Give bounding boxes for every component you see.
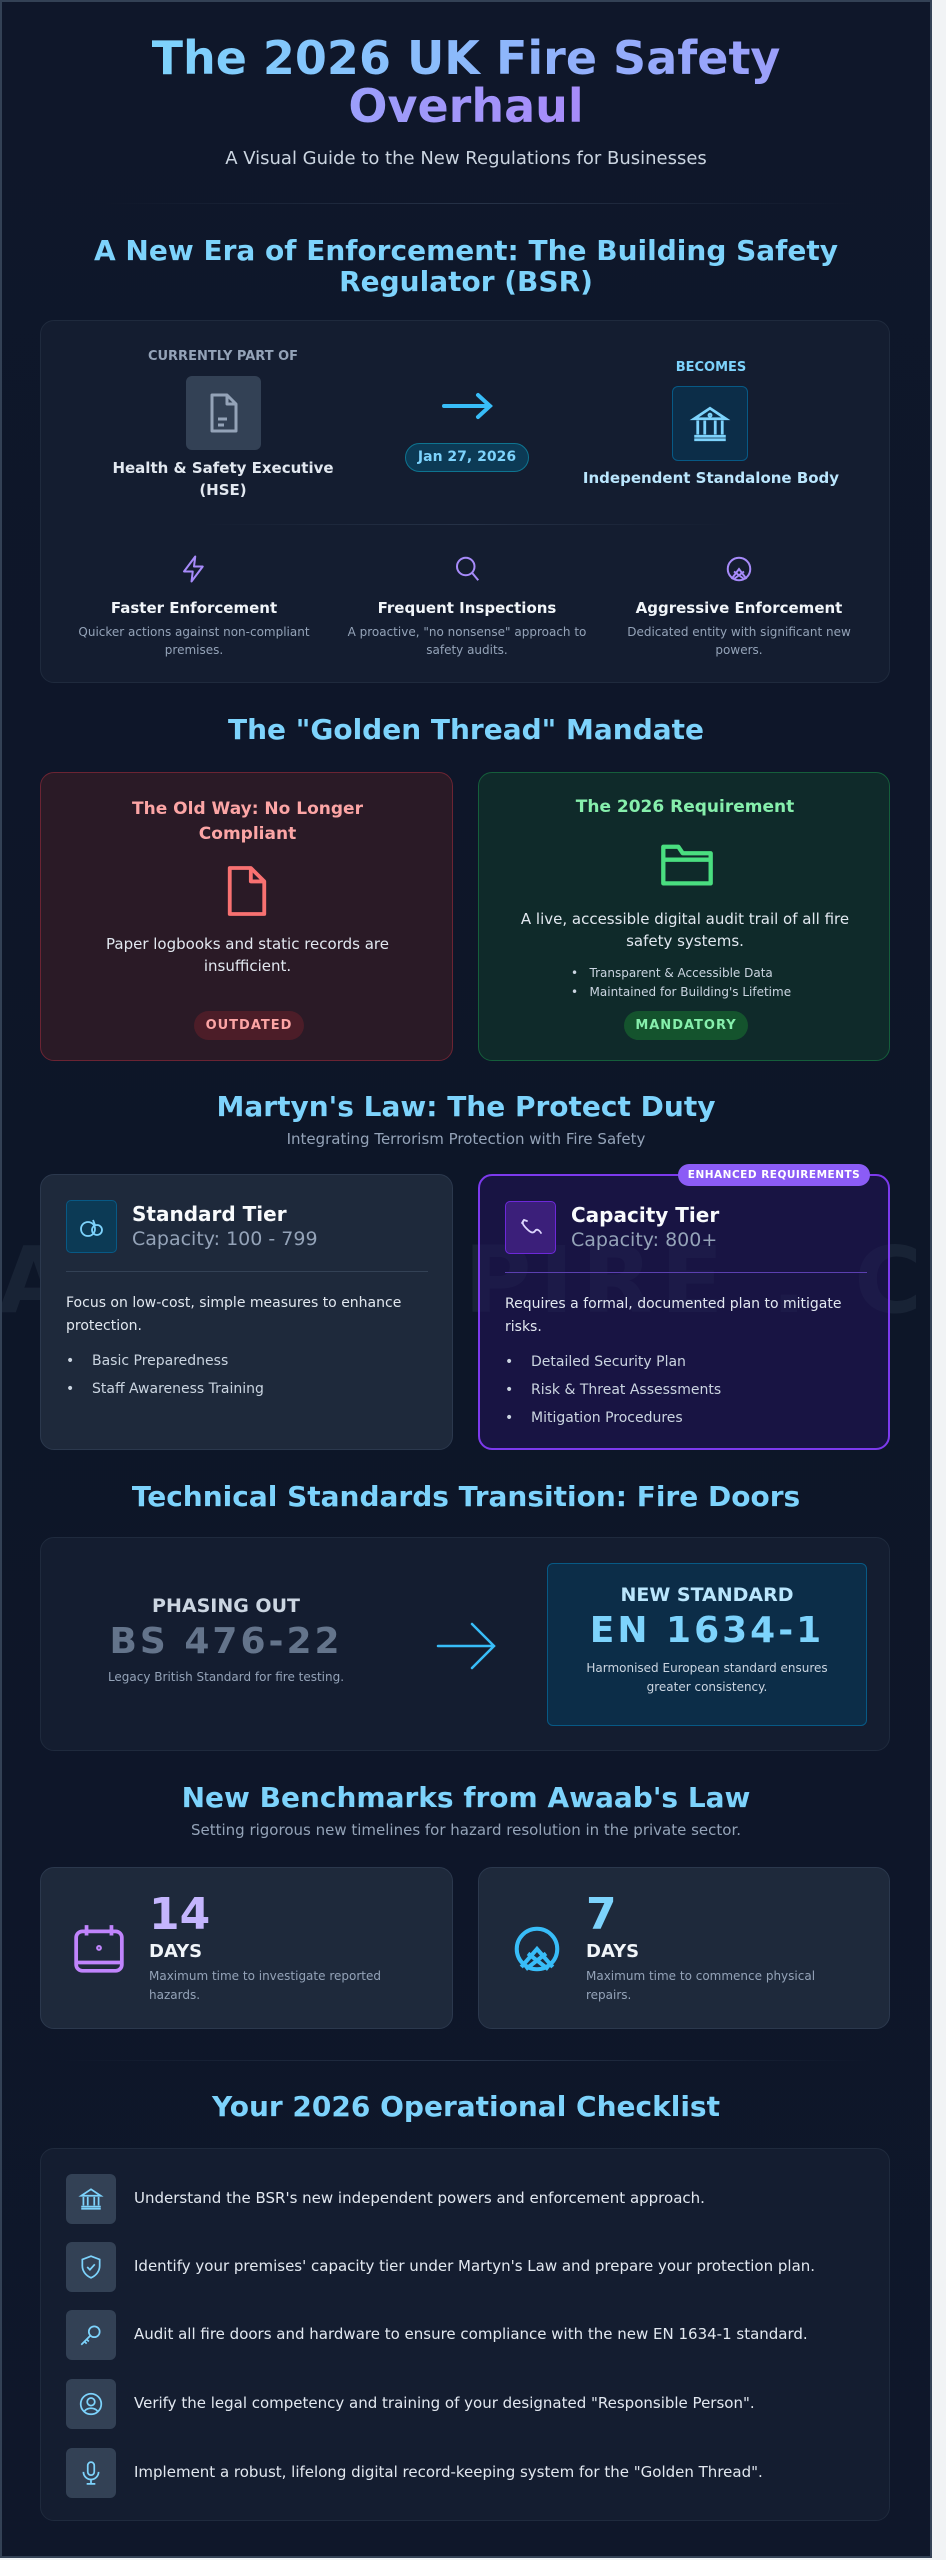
feature: aggressive bbox=[627, 556, 851, 657]
pill: outdated: OUTDATED bbox=[206, 1018, 292, 1033]
badge: enhanced: ENHANCED REQUIREMENTS bbox=[688, 1169, 860, 1181]
old standard bbox=[108, 1595, 344, 1684]
watermark bbox=[0, 1227, 932, 1334]
item 3 bbox=[66, 2310, 808, 2360]
stat card: 14 days: 14 bbox=[149, 1889, 210, 1940]
icon bbox=[66, 1200, 117, 1253]
heading: awaab's law: New Benchmarks from Awaab's Law bbox=[182, 1781, 750, 1814]
panel: BSR bbox=[40, 320, 890, 683]
bullet list: Basic Preparedness bbox=[92, 1353, 228, 1369]
card: capacity tier: Capacity: 800+ bbox=[571, 1229, 717, 1251]
card: capacity tier: Capacity Tier bbox=[571, 1203, 719, 1227]
stat card: 14 days: Maximum time to investigate reported hazards. bbox=[149, 1969, 381, 2002]
pill: outdated bbox=[194, 1011, 304, 1040]
feature: faster: Faster Enforcement bbox=[111, 599, 277, 617]
stat card: 7 days: DAYS bbox=[586, 1941, 639, 1962]
icon: institution bbox=[672, 386, 748, 461]
card: capacity tier: Requires a formal, documented plan to mitigate risks. bbox=[505, 1296, 841, 1335]
card: standard tier: Standard Tier bbox=[132, 1202, 287, 1226]
arrow bbox=[442, 392, 493, 420]
new standard box: EN 1634-1 bbox=[590, 1610, 824, 1651]
pill: mandatory: MANDATORY bbox=[635, 1018, 737, 1033]
stat card: 14 days: DAYS bbox=[149, 1941, 202, 1962]
icon bbox=[505, 1201, 556, 1254]
bullet list: Mitigation Procedures bbox=[531, 1410, 683, 1426]
item 3: Audit all fire doors and hardware to ensure compliance with the new EN 1634-1 standard. bbox=[134, 2325, 808, 2343]
item 4: Verify the legal competency and training of your designated "Responsible Person". bbox=[134, 2394, 755, 2412]
title: Overhaul bbox=[348, 79, 584, 133]
heading: BSR: A New Era of Enforcement: The Building Safety bbox=[94, 234, 838, 267]
card: old way bbox=[40, 772, 453, 1061]
pill: mandatory bbox=[624, 1011, 748, 1040]
item 5: Implement a robust, lifelong digital record-keeping system for the "Golden Thread". bbox=[134, 2463, 763, 2481]
badge: enhanced bbox=[678, 1164, 870, 1186]
heading: BSR: Regulator (BSR) bbox=[339, 265, 593, 298]
bullet list bbox=[507, 1354, 721, 1426]
old standard: PHASING OUT bbox=[152, 1595, 300, 1617]
new standard box bbox=[547, 1563, 867, 1726]
panel: fire doors bbox=[40, 1537, 890, 1751]
label: HSE: Health & Safety Executive (HSE) bbox=[112, 459, 334, 499]
bullet list: • Transparent & Accessible Data bbox=[571, 966, 773, 980]
card: 2026 requirement: A live, accessible digital audit trail of all fire safety systems. bbox=[521, 910, 849, 950]
date pill bbox=[405, 443, 529, 472]
feature: inspections: Frequent Inspections bbox=[378, 599, 556, 617]
feature: faster: Quicker actions against non-compliant premises. bbox=[78, 625, 310, 657]
stat card: 7 days: Maximum time to commence physical repairs. bbox=[586, 1969, 815, 2002]
icon: folder bbox=[661, 844, 713, 886]
new standard box: NEW STANDARD bbox=[620, 1584, 794, 1606]
feature: inspections bbox=[348, 556, 586, 657]
new standard box: Harmonised European standard ensures greater consistency. bbox=[586, 1661, 828, 1694]
heading: fire doors: Technical Standards Transition: Fire Doors bbox=[132, 1480, 800, 1513]
card: standard tier: Capacity: 100 - 799 bbox=[132, 1228, 318, 1250]
bullet list: Staff Awareness Training bbox=[92, 1381, 264, 1397]
item 1 bbox=[66, 2174, 705, 2224]
card: 2026 requirement: The 2026 Requirement bbox=[576, 797, 794, 817]
item 1: Understand the BSR's new independent powers and enforcement approach. bbox=[134, 2189, 705, 2207]
stat card: 7 days bbox=[478, 1867, 890, 2029]
bullet list bbox=[571, 966, 791, 999]
card: standard tier bbox=[40, 1174, 453, 1450]
date pill: Jan 27, 2026 bbox=[418, 449, 516, 465]
label: independent body: Independent Standalone Body bbox=[583, 469, 839, 487]
heading: martyn's law: Martyn's Law: The Protect Duty bbox=[217, 1090, 715, 1123]
subheading: Setting rigorous new timelines for hazard resolution in the private sector. bbox=[191, 1821, 741, 1839]
subtitle: A Visual Guide to the New Regulations for Businesses bbox=[225, 148, 707, 169]
item 4 bbox=[66, 2379, 755, 2429]
heading: golden thread: The "Golden Thread" Mandate bbox=[228, 713, 704, 746]
bullet list: Detailed Security Plan bbox=[531, 1354, 686, 1370]
stat card: 7 days: 7 bbox=[586, 1889, 617, 1940]
icon: HSE document bbox=[186, 376, 261, 450]
card: 2026 requirement bbox=[478, 772, 890, 1061]
card: standard tier: Focus on low-cost, simple measures to enhance protection. bbox=[66, 1295, 401, 1334]
feature: inspections: A proactive, "no nonsense" approach to safety audits. bbox=[348, 625, 586, 657]
title: The 2026 UK Fire Safety bbox=[152, 31, 780, 85]
panel: checklist bbox=[40, 2148, 890, 2521]
bullet list: Risk & Threat Assessments bbox=[531, 1382, 721, 1398]
item 5 bbox=[66, 2448, 763, 2498]
card: capacity tier bbox=[478, 1174, 890, 1450]
arrow bbox=[436, 1622, 496, 1670]
label: currently part of: CURRENTLY PART OF bbox=[148, 349, 298, 364]
feature: aggressive: Dedicated entity with significant new powers. bbox=[627, 625, 851, 657]
watermark: A bbox=[0, 1227, 69, 1334]
feature: faster bbox=[78, 556, 310, 657]
stat card: 14 days bbox=[40, 1867, 453, 2029]
item 2: Identify your premises' capacity tier under Martyn's Law and prepare your protection plan. bbox=[134, 2257, 815, 2275]
bullet list: • Maintained for Building's Lifetime bbox=[571, 985, 791, 999]
bullet list bbox=[68, 1353, 264, 1397]
card: old way: Paper logbooks and static records are insufficient. bbox=[106, 935, 389, 975]
heading: BSR bbox=[94, 234, 838, 298]
title bbox=[152, 31, 780, 133]
old standard: BS 476-22 bbox=[109, 1621, 343, 1662]
subheading: Integrating Terrorism Protection with Fire Safety bbox=[287, 1130, 645, 1148]
feature: aggressive: Aggressive Enforcement bbox=[636, 599, 842, 617]
heading: checklist: Your 2026 Operational Checklist bbox=[212, 2090, 720, 2123]
card: old way: The Old Way: No Longer Compliant bbox=[132, 799, 363, 844]
icon: paper doc bbox=[228, 866, 266, 916]
old standard: Legacy British Standard for fire testing. bbox=[108, 1670, 344, 1684]
label: becomes: BECOMES bbox=[676, 360, 746, 375]
item 2 bbox=[66, 2242, 815, 2292]
